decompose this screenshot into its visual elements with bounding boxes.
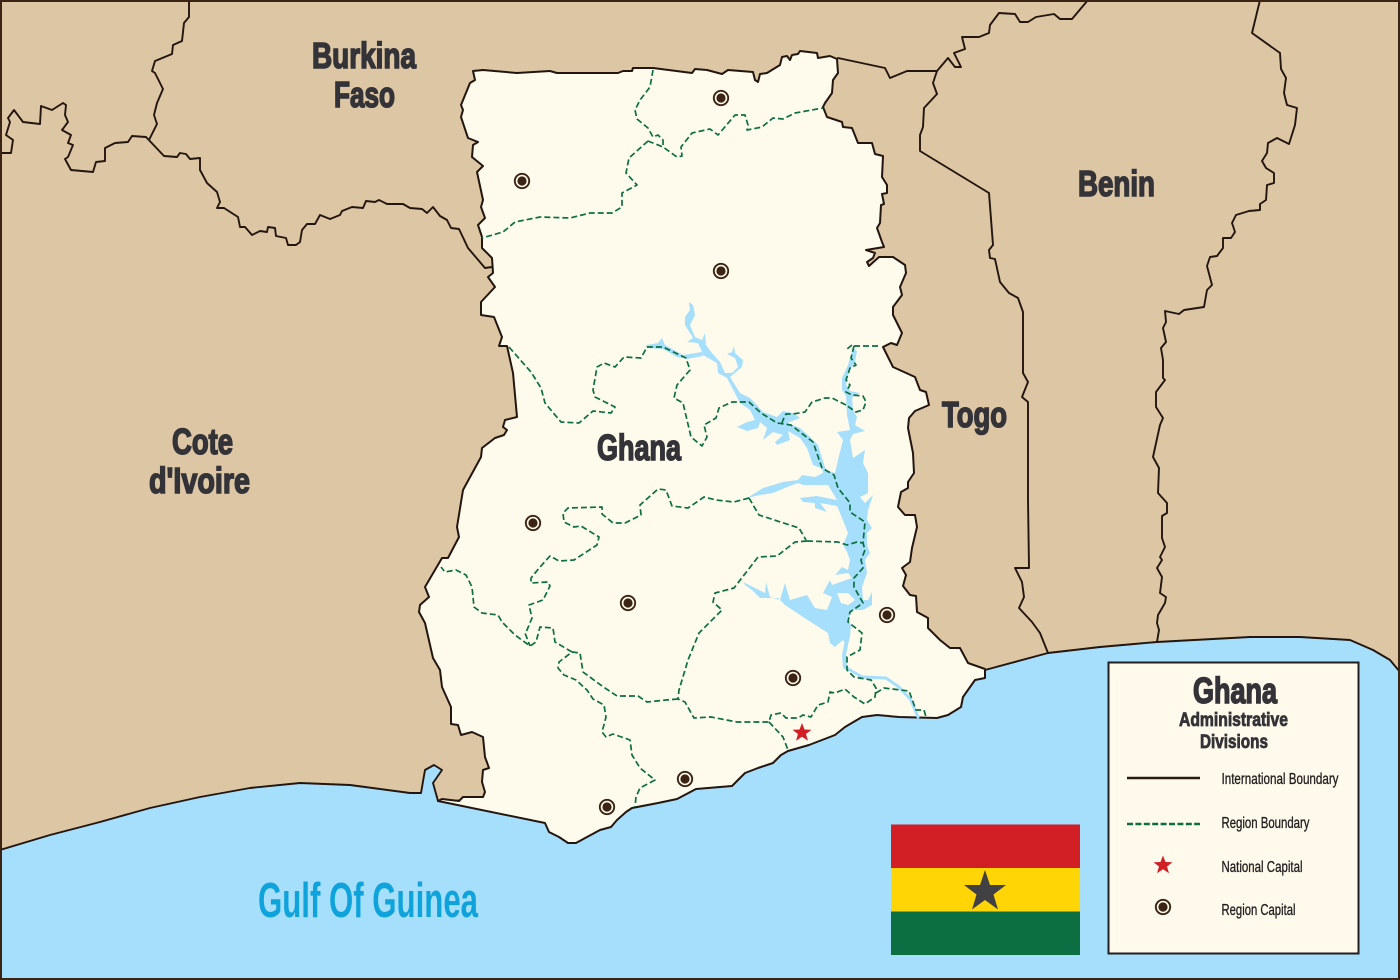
label: Burkina Faso: Faso [334,74,395,115]
label: Ghana: Ghana [597,427,682,468]
country labels [149,35,1155,501]
legend title: Divisions [1200,732,1268,753]
legend: region boundary: Region Boundary [1222,815,1310,832]
legend: national capital: National Capital [1222,859,1302,876]
Lake Volta [647,302,918,717]
international boundaries of neighbouring countries [0,0,1297,653]
legend: region capital [1156,900,1296,919]
legend title: Administrative [1179,710,1288,731]
label: Togo: Togo [942,394,1007,435]
flag of Ghana [891,824,1080,955]
legend title [1179,670,1288,753]
label: Benin: Benin [1078,163,1155,204]
region boundaries [441,70,926,807]
label: Cote d'Ivoire [149,421,250,501]
icon: flag star [964,870,1006,910]
label: Burkina Faso [312,35,417,115]
icon: national capital star [792,723,812,741]
legend: national capital [1154,856,1302,876]
legend: region capital: Region Capital [1222,902,1296,919]
label: Cote d'Ivoire: d'Ivoire [149,460,250,501]
label: Gulf Of Guinea: Gulf Of Guinea [258,874,478,928]
label: Burkina Faso: Burkina [312,35,417,76]
legend panel [1108,662,1358,954]
region capitals [515,91,894,814]
label: Cote d'Ivoire: Cote [172,421,233,462]
legend title: Ghana [1193,670,1278,711]
Ghana territory [419,51,985,843]
legend: international boundary: International Boundary [1222,771,1338,788]
